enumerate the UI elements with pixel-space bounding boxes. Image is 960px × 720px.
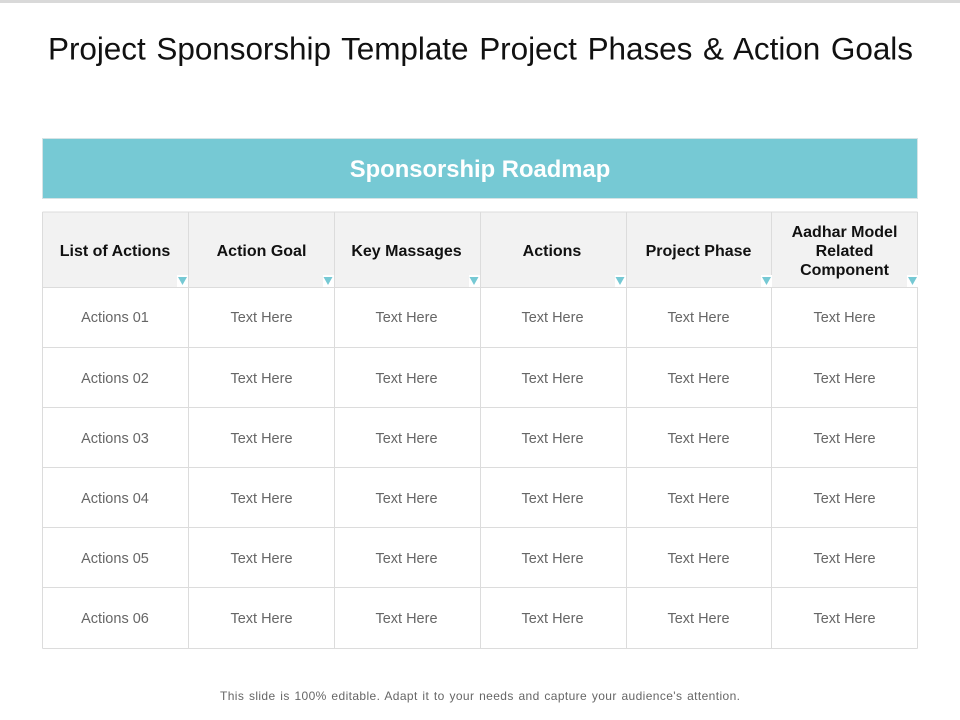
row: Actions 05: Text Here [375,551,438,567]
row: Actions 04 [81,491,876,507]
banner: Sponsorship Roadmap [42,138,918,198]
top bar [0,0,960,3]
row: Actions 03: Text Here [375,431,438,447]
row: Actions 01: Text Here [813,310,876,326]
table header background [42,212,918,288]
banner: Sponsorship Roadmap: Sponsorship Roadmap [350,156,610,183]
row: Actions 06: Text Here [667,611,730,627]
row: Actions 01: Text Here [521,310,584,326]
column headers: Key Massages [351,243,462,260]
row: Actions 06: Text Here [521,611,584,627]
row: Actions 05: Actions 05 [81,551,149,567]
row: Actions 01: Text Here [667,310,730,326]
row: Actions 03 [81,431,876,447]
row: Actions 05: Text Here [813,551,876,567]
row: Actions 05: Text Here [521,551,584,567]
table [42,212,918,648]
column headers: Related [816,243,873,260]
row: Actions 02: Text Here [813,371,876,387]
row: Actions 01: Actions 01 [81,310,149,326]
row: Actions 03: Actions 03 [81,431,149,447]
row: Actions 02 [81,371,876,387]
row: Actions 04: Text Here [521,491,584,507]
column headers: List of Actions [60,243,170,260]
row: Actions 05: Text Here [667,551,730,567]
row: Actions 06: Actions 06 [81,611,149,627]
row: Actions 03: Text Here [813,431,876,447]
row: Actions 02: Text Here [230,371,293,387]
row: Actions 02: Text Here [375,371,438,387]
row: Actions 04: Text Here [813,491,876,507]
column headers: Actions [523,243,581,260]
row: Actions 01 [81,310,876,326]
column headers: Component [800,262,890,279]
row: Actions 01: Text Here [230,310,293,326]
row: Actions 01: Text Here [375,310,438,326]
title: Project Sponsorship Template Project Phases & Action Goals [48,30,913,66]
row: Actions 04: Text Here [667,491,730,507]
row: Actions 06 [81,611,876,627]
row: Actions 05: Text Here [230,551,293,567]
row: Actions 03: Text Here [230,431,293,447]
row: Actions 06: Text Here [813,611,876,627]
row: Actions 03: Text Here [667,431,730,447]
row: Actions 04: Actions 04 [81,491,149,507]
row: Actions 04: Text Here [230,491,293,507]
row: Actions 03: Text Here [521,431,584,447]
row: Actions 06: Text Here [230,611,293,627]
row: Actions 02: Text Here [667,371,730,387]
footer note: This slide is 100% editable. Adapt it to your needs and capture your audience's attention. [220,689,740,703]
column headers [60,224,897,279]
column headers: Action Goal [217,243,306,260]
column headers: Project Phase [646,243,752,260]
row: Actions 02: Text Here [521,371,584,387]
column headers: Aadhar Model [792,224,897,241]
row: Actions 02: Actions 02 [81,371,149,387]
row: Actions 04: Text Here [375,491,438,507]
row: Actions 06: Text Here [375,611,438,627]
row: Actions 05 [81,551,876,567]
header filter markers [177,275,918,287]
